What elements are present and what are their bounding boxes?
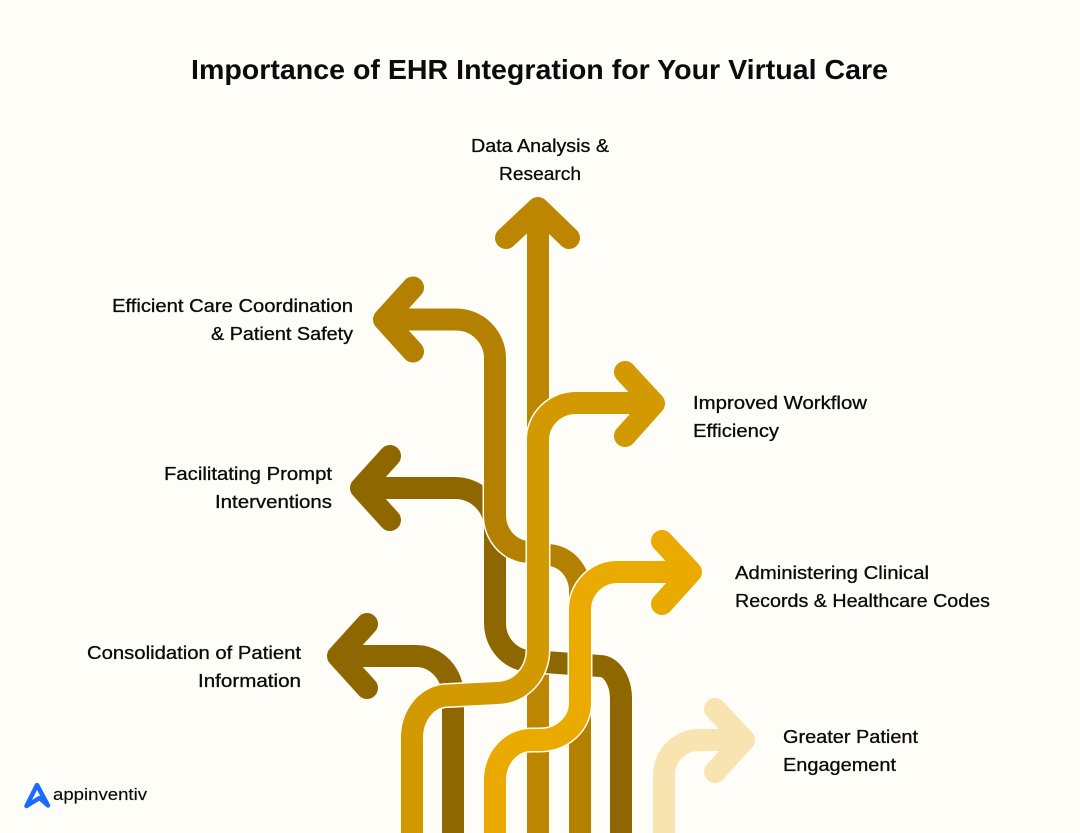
logo wordmark: appinventiv <box>53 785 148 804</box>
label: efficient care coordination and patient safety: & Patient Safety <box>211 324 353 344</box>
label: greater patient engagement: Greater Patient <box>783 727 918 747</box>
label: improved workflow efficiency: Efficiency <box>693 421 779 441</box>
label: facilitating prompt interventions <box>164 464 332 512</box>
label: facilitating prompt interventions: Interventions <box>215 492 332 512</box>
arrow: consolidation of patient information <box>338 624 453 833</box>
label: data analysis and research: Data Analysis & <box>471 136 609 156</box>
label: greater patient engagement <box>783 727 918 775</box>
label: consolidation of patient information: Consolidation of Patient <box>87 643 301 663</box>
label: data analysis and research: Research <box>499 164 581 184</box>
label: greater patient engagement: Engagement <box>783 755 896 775</box>
arrow: greater patient engagement <box>664 709 744 833</box>
arrow: efficient care coordination and patient safety <box>384 288 580 833</box>
title: Importance of EHR Integration for Your Virtual Care <box>191 54 888 85</box>
arrow: data analysis and research <box>506 208 569 833</box>
arrow: facilitating prompt interventions <box>361 456 621 833</box>
arrow: improved workflow efficiency <box>412 372 654 833</box>
label: improved workflow efficiency <box>693 393 868 441</box>
label: improved workflow efficiency: Improved Workflow <box>693 393 868 413</box>
arrow: administering clinical records and healthcare codes <box>495 541 691 833</box>
logo: appinventiv <box>26 785 148 806</box>
label: data analysis and research <box>471 136 609 184</box>
label: efficient care coordination and patient safety: Efficient Care Coordination <box>112 296 353 316</box>
label: consolidation of patient information: Information <box>198 671 301 691</box>
label: administering clinical records and healthcare codes <box>735 563 990 611</box>
label: administering clinical records and healthcare codes: Records & Healthcare Codes <box>735 591 990 611</box>
label: consolidation of patient information <box>87 643 301 691</box>
icon: logo mark <box>26 785 48 806</box>
label: administering clinical records and healthcare codes: Administering Clinical <box>735 563 929 583</box>
label: facilitating prompt interventions: Facilitating Prompt <box>164 464 332 484</box>
label: efficient care coordination and patient safety <box>112 296 353 344</box>
